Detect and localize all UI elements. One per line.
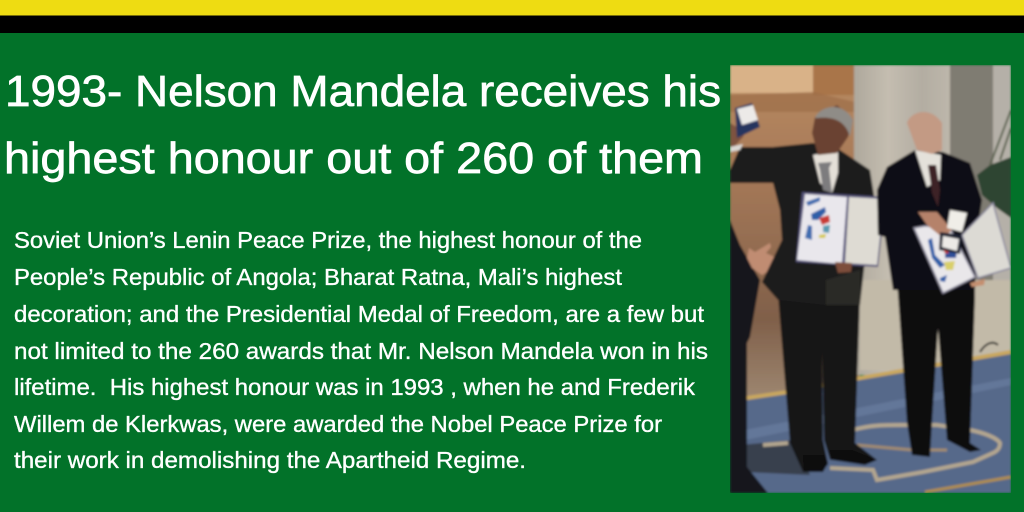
de Klerk suit bbox=[877, 150, 982, 290]
hall wall bbox=[730, 65, 860, 405]
plant bbox=[977, 157, 1011, 218]
columns bbox=[854, 65, 951, 375]
title bbox=[4, 67, 721, 183]
Mandela head bbox=[812, 105, 853, 155]
carpet emblem bbox=[763, 425, 1000, 480]
body text: People’s Republic of Angola; Bharat Ratna, Mali’s highest bbox=[14, 264, 623, 290]
Mandela trousers bbox=[778, 295, 877, 472]
floor cable bbox=[980, 343, 998, 352]
body text: decoration; and the Presidential Medal of Freedom, are a few but bbox=[14, 301, 705, 327]
body text: not limited to the 260 awards that Mr. Nelson Mandela won in his bbox=[14, 338, 708, 364]
carpet bbox=[730, 352, 1011, 493]
de Klerk lower hand bbox=[970, 279, 985, 287]
body text: Willem de Klerkwas, were awarded the Nobel Peace Prize for bbox=[14, 411, 662, 437]
Mandela diploma bbox=[796, 192, 886, 267]
de Klerk hand bbox=[918, 212, 952, 238]
de Klerk diploma bbox=[914, 226, 975, 293]
de Klerk medal bbox=[947, 210, 967, 232]
body text: Soviet Union’s Lenin Peace Prize, the highest honour of the bbox=[14, 227, 642, 253]
Mandela suit bbox=[730, 143, 874, 305]
body text: their work in demolishing the Apartheid Regime. bbox=[14, 447, 526, 473]
left person hands bbox=[747, 243, 781, 275]
Mandela medal box bbox=[735, 103, 760, 138]
Mandela shirt and tie bbox=[813, 150, 838, 193]
Mandela raised hand bbox=[730, 123, 744, 147]
title: highest honour out of 260 of them bbox=[4, 134, 703, 183]
black band bbox=[0, 16, 1024, 33]
Mandela hand bbox=[835, 262, 852, 273]
left person bbox=[730, 220, 768, 493]
photo: Mandela and de Klerk holding Nobel diplomas bbox=[730, 65, 1011, 493]
Mandela diploma artwork bbox=[805, 197, 820, 240]
gold strip bbox=[747, 352, 1011, 398]
de Klerk head bbox=[907, 112, 942, 154]
yellow band bbox=[0, 0, 1024, 16]
de Klerk trousers bbox=[897, 280, 981, 457]
de Klerk shirt and tie bbox=[915, 150, 941, 187]
body text: lifetime. His highest honour was in 1993 , when he and Frederik bbox=[14, 374, 696, 400]
title: 1993- Nelson Mandela receives his bbox=[5, 67, 721, 116]
body text bbox=[14, 227, 708, 473]
